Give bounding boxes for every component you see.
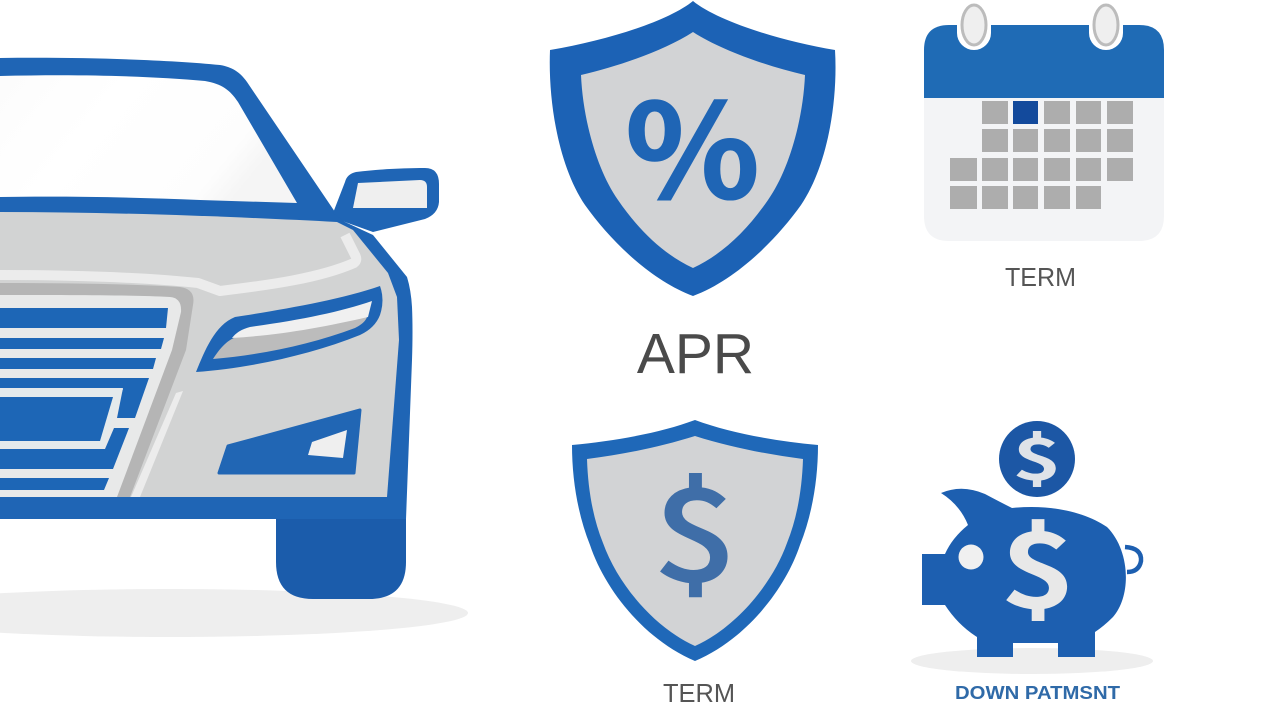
calendar header — [924, 25, 1164, 98]
pig tail — [1125, 547, 1141, 572]
pig eye — [958, 544, 984, 570]
dollar symbol: $ — [653, 433, 737, 618]
grille inner panel — [0, 295, 181, 497]
car body outline — [0, 58, 412, 519]
ground shadow — [0, 589, 468, 637]
label: down payment: DOWN PATMSNT — [955, 683, 1120, 703]
binding ring notches — [957, 0, 1123, 50]
day grid — [950, 101, 1133, 209]
pig dollar sign: $ — [1000, 487, 1076, 639]
coin — [999, 421, 1075, 497]
hood and front panel — [0, 212, 399, 497]
side mirror — [333, 168, 439, 232]
grille bars — [0, 308, 168, 490]
headlight — [196, 286, 382, 372]
icon: dollar shield — [572, 420, 818, 661]
shield inner — [581, 32, 805, 268]
coin dollar sign: $ — [1012, 413, 1062, 497]
icon: APR shield — [550, 1, 836, 296]
label: calendar TERM: TERM — [1005, 262, 1076, 292]
label: shield TERM: TERM — [663, 678, 735, 708]
hood highlight — [0, 235, 356, 291]
ground shadow — [911, 648, 1153, 674]
icon: calendar — [924, 0, 1164, 241]
binding rings — [962, 5, 1118, 45]
wheel — [276, 510, 406, 599]
shield inner — [587, 436, 803, 646]
icon: piggy bank — [911, 413, 1153, 674]
percent symbol: % — [625, 48, 760, 236]
shield outer — [572, 420, 818, 661]
fog light — [219, 410, 360, 473]
illustration: car front — [0, 58, 468, 637]
shield outer — [550, 1, 836, 296]
calendar body — [924, 90, 1164, 241]
label: APR: APR — [637, 322, 754, 386]
pig body — [922, 489, 1126, 657]
grille surround — [0, 283, 193, 497]
bumper highlight stripe — [131, 391, 183, 497]
windshield — [0, 75, 297, 203]
